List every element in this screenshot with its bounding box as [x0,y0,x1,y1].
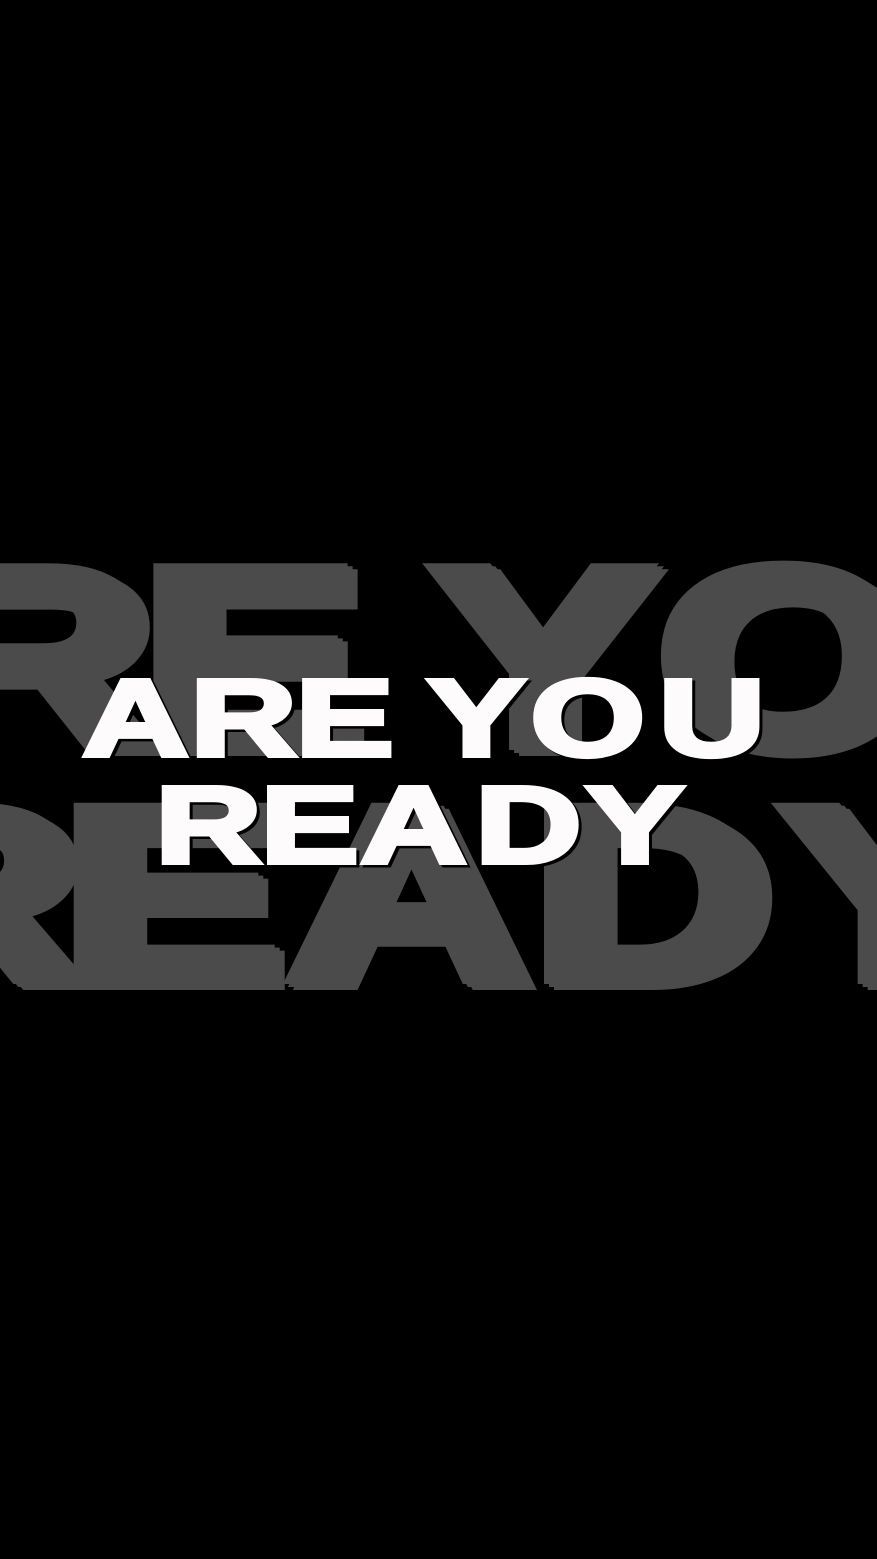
headline shadow [3,660,768,889]
headline shadow: ARE YOU [3,660,768,782]
headline shadow: READY [158,767,687,889]
headline: ARE YOU READY: READY [155,765,684,886]
headline: ARE YOU READY [0,658,765,886]
headline: ARE YOU READY: ARE YOU [0,658,765,779]
